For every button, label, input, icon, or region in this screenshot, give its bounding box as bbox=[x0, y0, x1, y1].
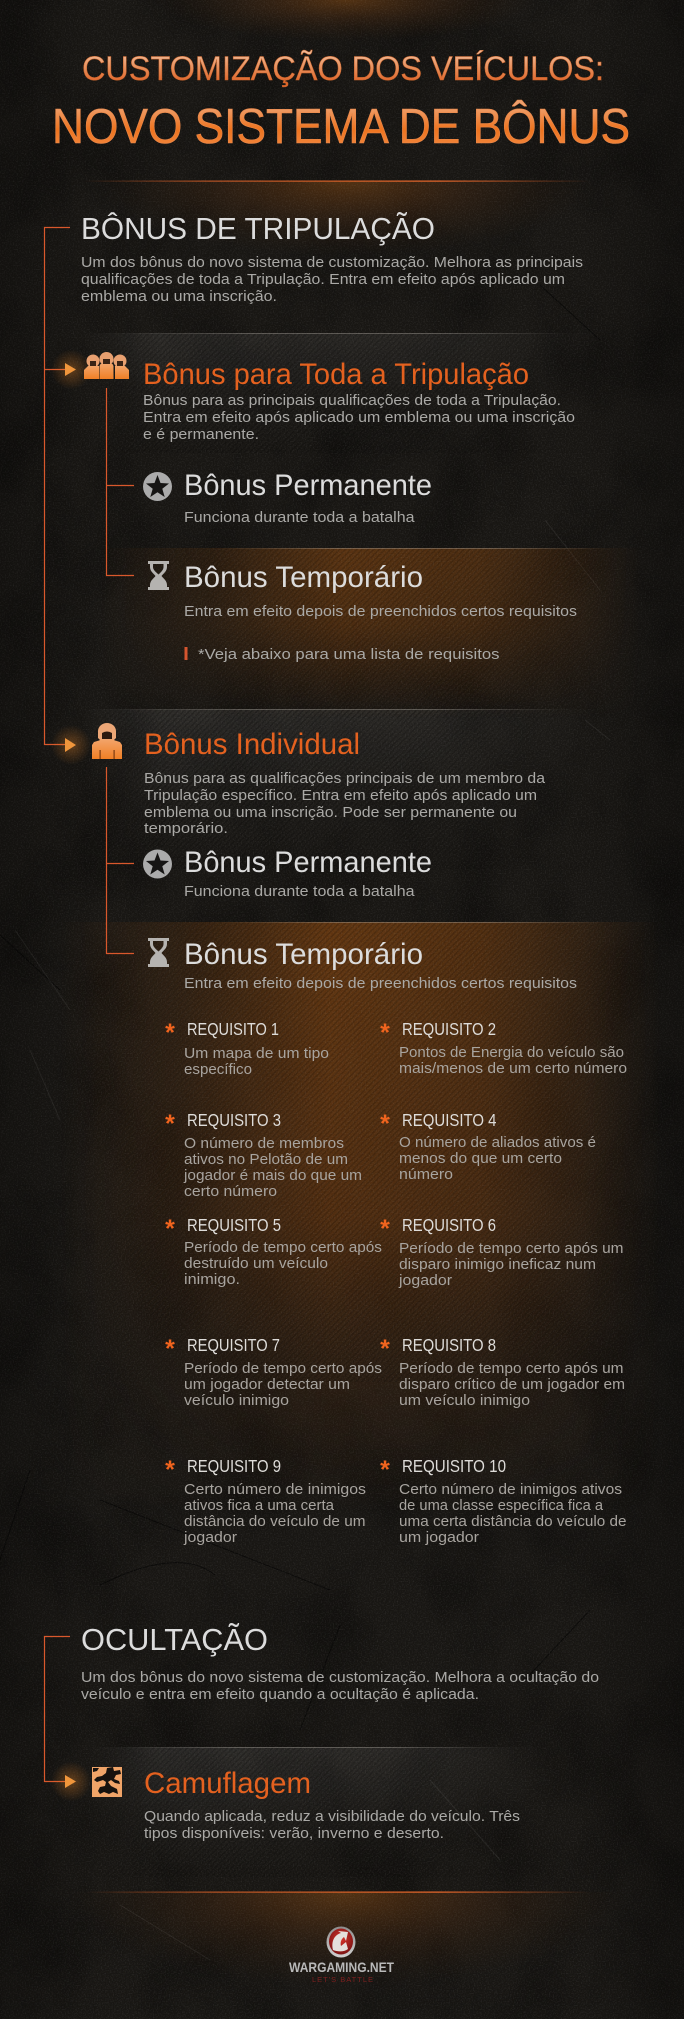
requirement 10: de uma classe específica fica a bbox=[399, 1497, 604, 1514]
requirement 10: um jogador bbox=[399, 1529, 479, 1546]
heading: Ocultação: OCULTAÇÃO bbox=[81, 1622, 268, 1657]
icon: star medal bbox=[143, 472, 172, 501]
requirement 10: REQUISITO 10 bbox=[402, 1456, 506, 1476]
requirement 9: jogador bbox=[183, 1529, 237, 1546]
item: temporary bonus bbox=[184, 561, 577, 620]
item: permanent bonus: Bônus Permanente bbox=[184, 469, 432, 502]
requirement 4: número bbox=[399, 1166, 453, 1183]
item: temporary bonus: Bônus Temporário bbox=[184, 561, 423, 594]
heading: Bônus de Tripulação: BÔNUS DE TRIPULAÇÃO bbox=[81, 211, 435, 246]
item: temporary bonus: Entra em efeito depois de preenchidos certos requisitos bbox=[184, 603, 577, 620]
title bbox=[52, 50, 630, 154]
text: crew bonus description: qualificações de toda a Tripulação. Entra em efeito após aplicado um bbox=[81, 271, 565, 288]
icon: camouflage bbox=[92, 1767, 122, 1797]
item: temporary bonus bbox=[184, 938, 577, 992]
text: individual description: temporário. bbox=[144, 820, 228, 837]
requirement 7: REQUISITO 7 bbox=[187, 1335, 280, 1355]
requirement 4: menos do que um certo bbox=[399, 1150, 562, 1167]
requirement 8 bbox=[380, 1335, 625, 1409]
icon: star medal bbox=[143, 850, 172, 878]
text: camouflage description: tipos disponíveis: verão, inverno e deserto. bbox=[144, 1825, 444, 1842]
requirement 8: disparo crítico de um jogador em bbox=[399, 1376, 625, 1393]
logo: Wargaming.net: LET'S BATTLE bbox=[312, 1975, 373, 1984]
connector: crew-wide bonus tree bbox=[106, 388, 134, 576]
heading: Camuflagem: Camuflagem bbox=[144, 1767, 311, 1800]
item: permanent bonus bbox=[184, 469, 432, 526]
requirement 2: mais/menos de um certo número bbox=[399, 1060, 627, 1077]
text: individual description: emblema ou uma inscrição. Pode ser permanente ou bbox=[144, 804, 517, 821]
requirement 6: Período de tempo certo após um bbox=[399, 1240, 624, 1257]
requirement 5 bbox=[165, 1215, 382, 1288]
title: CUSTOMIZAÇÃO DOS VEÍCULOS: bbox=[82, 50, 604, 88]
requirement 7: veículo inimigo bbox=[184, 1392, 289, 1409]
requirement 3: REQUISITO 3 bbox=[187, 1110, 281, 1130]
requirement 7: Período de tempo certo após bbox=[184, 1360, 382, 1377]
text: camouflage description: Quando aplicada, reduz a visibilidade do veículo. Três bbox=[144, 1808, 520, 1825]
requirement 6: REQUISITO 6 bbox=[402, 1215, 496, 1235]
connector: individual bonus tree bbox=[106, 767, 134, 954]
icon: logo emblem bbox=[326, 1926, 356, 1958]
requirement 8: um veículo inimigo bbox=[399, 1392, 530, 1409]
requirement 1: * bbox=[165, 1019, 175, 1047]
requirement 9 bbox=[165, 1456, 366, 1546]
requirement 8: Período de tempo certo após um bbox=[399, 1360, 624, 1377]
requirement 3: O número de membros bbox=[184, 1135, 344, 1152]
item: permanent bonus: Bônus Permanente bbox=[184, 846, 432, 879]
requirement 8: * bbox=[380, 1335, 390, 1363]
heading: Bônus para Toda a Tripulação: Bônus para Toda a Tripulação bbox=[143, 358, 529, 391]
item: temporary bonus: Entra em efeito depois de preenchidos certos requisitos bbox=[184, 975, 577, 992]
icon: hourglass bbox=[148, 561, 169, 590]
requirement 1: específico bbox=[184, 1061, 252, 1078]
requirement 1 bbox=[165, 1019, 329, 1078]
requirement 4: REQUISITO 4 bbox=[402, 1110, 497, 1130]
item: temporary bonus: Bônus Temporário bbox=[184, 938, 423, 971]
item: permanent bonus: Funciona durante toda a batalha bbox=[184, 883, 415, 900]
requirement 1: REQUISITO 1 bbox=[187, 1019, 279, 1039]
requirement 3: jogador é mais do que um bbox=[183, 1167, 362, 1184]
requirement 6 bbox=[380, 1215, 624, 1289]
requirement 6: jogador bbox=[398, 1272, 452, 1289]
item: permanent bonus: Funciona durante toda a batalha bbox=[184, 509, 415, 526]
text: concealment description: veículo e entra em efeito quando a ocultação é aplicada. bbox=[81, 1686, 479, 1703]
connector: concealment bracket bbox=[44, 1636, 70, 1782]
requirement 2: * bbox=[380, 1019, 390, 1047]
arrow: to crew-wide bonus bbox=[51, 350, 91, 390]
requirement 7: um jogador detectar um bbox=[184, 1376, 350, 1393]
logo: Wargaming.net bbox=[289, 1926, 394, 1984]
requirement 9: REQUISITO 9 bbox=[187, 1456, 281, 1476]
text: crew-wide description: e é permanente. bbox=[143, 426, 259, 443]
requirement 6: disparo inimigo ineficaz num bbox=[399, 1256, 596, 1273]
requirement 10: uma certa distância do veículo de bbox=[399, 1513, 626, 1530]
requirement 5: REQUISITO 5 bbox=[187, 1215, 281, 1235]
connector: crew section bracket bbox=[44, 228, 70, 744]
requirement 7 bbox=[165, 1335, 382, 1409]
text: crew-wide description: Bônus para as principais qualificações de toda a Tripulação. bbox=[143, 392, 561, 409]
panel: individual bonus bbox=[144, 728, 546, 837]
text: concealment description: Um dos bônus do novo sistema de customização. Melhora a ocultação do bbox=[81, 1669, 599, 1686]
text: individual description: Tripulação específico. Entra em efeito após aplicado um bbox=[144, 787, 537, 804]
requirement 6: * bbox=[380, 1215, 390, 1243]
text: crew-wide description bbox=[143, 392, 575, 443]
callout: see requirements note: *Veja abaixo para uma lista de requisitos bbox=[198, 646, 500, 663]
requirement 9: ativos fica a uma certa bbox=[184, 1497, 335, 1514]
band: individual bonus backdrop bbox=[110, 709, 556, 786]
icon: crew bbox=[84, 352, 129, 379]
text: camouflage description bbox=[144, 1808, 520, 1842]
text: concealment description bbox=[81, 1669, 599, 1703]
icon: hourglass bbox=[148, 938, 169, 967]
icon: individual crew member bbox=[92, 723, 122, 759]
band: crew bonus backdrop bbox=[113, 333, 558, 387]
requirement 4 bbox=[380, 1110, 596, 1183]
requirement 3: certo número bbox=[184, 1183, 277, 1200]
requirement 9: * bbox=[165, 1456, 175, 1484]
requirement 7: * bbox=[165, 1335, 175, 1363]
requirement 5: inimigo. bbox=[184, 1271, 240, 1288]
requirement 2: Pontos de Energia do veículo são bbox=[399, 1044, 624, 1061]
requirement 5: destruído um veículo bbox=[184, 1255, 328, 1272]
requirement 3: * bbox=[165, 1110, 175, 1138]
arrow: to camouflage bbox=[51, 1762, 91, 1802]
requirement 3: ativos no Pelotão de um bbox=[184, 1151, 348, 1168]
requirement 9: distância do veículo de um bbox=[184, 1513, 366, 1530]
requirement 2: REQUISITO 2 bbox=[402, 1019, 496, 1039]
band: temporary individual bonus glow bbox=[100, 922, 632, 1456]
text: individual description: Bônus para as qualificações principais de um membro da bbox=[144, 770, 546, 787]
text: crew bonus description: emblema ou uma inscrição. bbox=[81, 288, 277, 305]
requirement 5: Período de tempo certo após bbox=[184, 1239, 382, 1256]
panel: crew-wide bonus bbox=[143, 358, 575, 443]
requirement 8: REQUISITO 8 bbox=[402, 1335, 496, 1355]
requirement 4: * bbox=[380, 1110, 390, 1138]
requirement 3 bbox=[165, 1110, 362, 1200]
band: camouflage backdrop bbox=[114, 1747, 498, 1814]
requirement 2 bbox=[380, 1019, 627, 1077]
requirement 1: Um mapa de um tipo bbox=[184, 1045, 329, 1062]
text: crew bonus description bbox=[81, 254, 583, 305]
requirement 9: Certo número de inimigos bbox=[184, 1481, 366, 1498]
requirement 10 bbox=[380, 1456, 626, 1546]
requirement 10: Certo número de inimigos ativos bbox=[399, 1481, 622, 1498]
text: crew-wide description: Entra em efeito após aplicado um emblema ou uma inscrição bbox=[143, 409, 575, 426]
section: crew bonus bbox=[81, 211, 583, 305]
arrow: to individual bonus bbox=[51, 725, 91, 765]
title: NOVO SISTEMA DE BÔNUS bbox=[52, 100, 630, 154]
band: temporary crew bonus glow bbox=[140, 548, 613, 702]
panel: camouflage bbox=[144, 1767, 520, 1842]
requirement 5: * bbox=[165, 1215, 175, 1243]
section: concealment bbox=[81, 1622, 599, 1703]
heading: Bônus Individual: Bônus Individual bbox=[144, 728, 360, 761]
list: requirements bbox=[165, 1019, 627, 1546]
requirement 4: O número de aliados ativos é bbox=[399, 1134, 596, 1151]
item: permanent bonus bbox=[184, 846, 432, 900]
requirement 10: * bbox=[380, 1456, 390, 1484]
text: crew bonus description: Um dos bônus do novo sistema de customização. Melhora as principais bbox=[81, 254, 583, 271]
logo: Wargaming.net: WARGAMING.NET bbox=[289, 1959, 394, 1975]
text: individual description bbox=[144, 770, 546, 837]
